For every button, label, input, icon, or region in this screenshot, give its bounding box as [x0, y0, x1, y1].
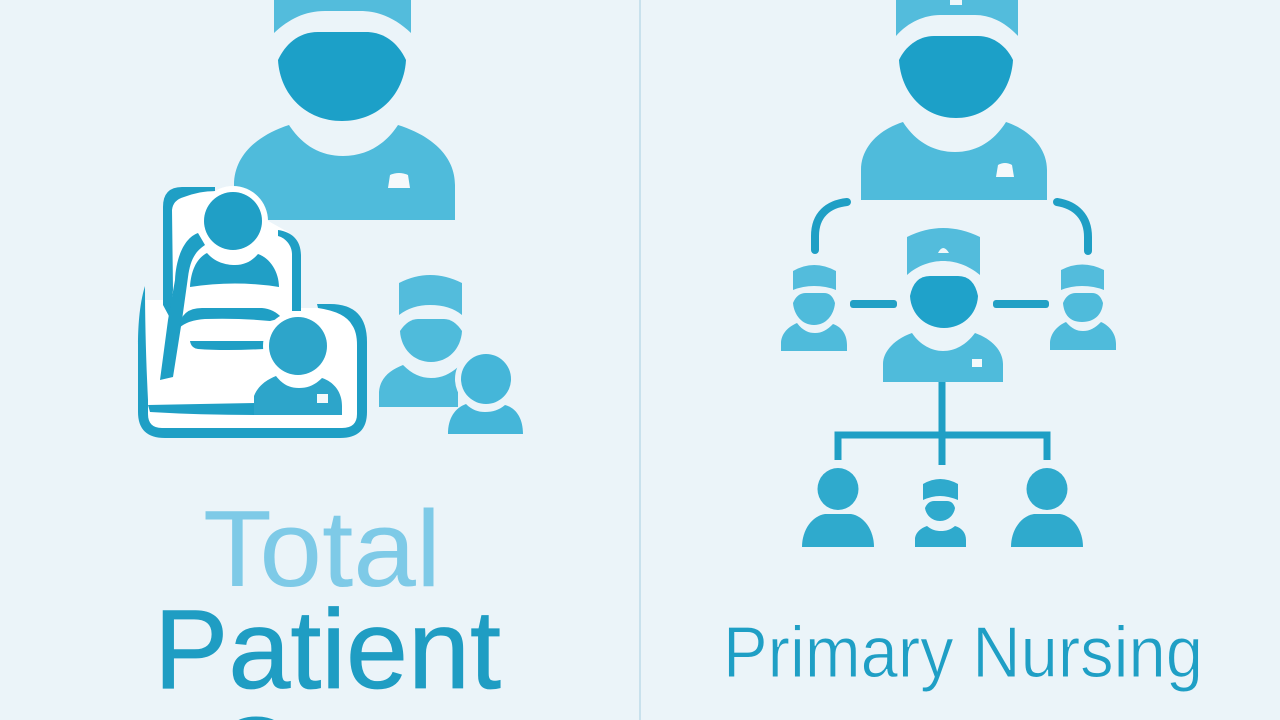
nurse beside bed — [254, 311, 342, 415]
panel: primary nursing — [723, 0, 1203, 693]
icon: hospital bed with patient and nurse — [138, 186, 367, 438]
icon: left team member — [802, 468, 874, 547]
icon: small patient — [448, 348, 523, 434]
heading: total patient care — [154, 488, 501, 720]
connector: side links — [850, 300, 1049, 308]
icon: small nurse — [379, 275, 462, 407]
icon: left nurse — [781, 265, 847, 351]
icon: lead nurse — [234, 0, 455, 220]
panel: total patient care — [138, 0, 523, 720]
patient in bed — [190, 186, 279, 287]
connector: tree below center nurse — [838, 382, 1047, 465]
heading: primary nursing: Primary Nursing — [723, 613, 1203, 693]
icon: head nurse — [861, 0, 1047, 200]
icon: right team member — [1011, 468, 1083, 547]
icon: center nurse — [883, 228, 1003, 382]
icon: center team nurse — [915, 479, 966, 547]
connector: arcs from head nurse — [815, 202, 1088, 251]
icon: right nurse — [1050, 264, 1116, 350]
heading: total patient care: Patient — [154, 587, 501, 712]
heading: total patient care: Total — [203, 488, 441, 610]
